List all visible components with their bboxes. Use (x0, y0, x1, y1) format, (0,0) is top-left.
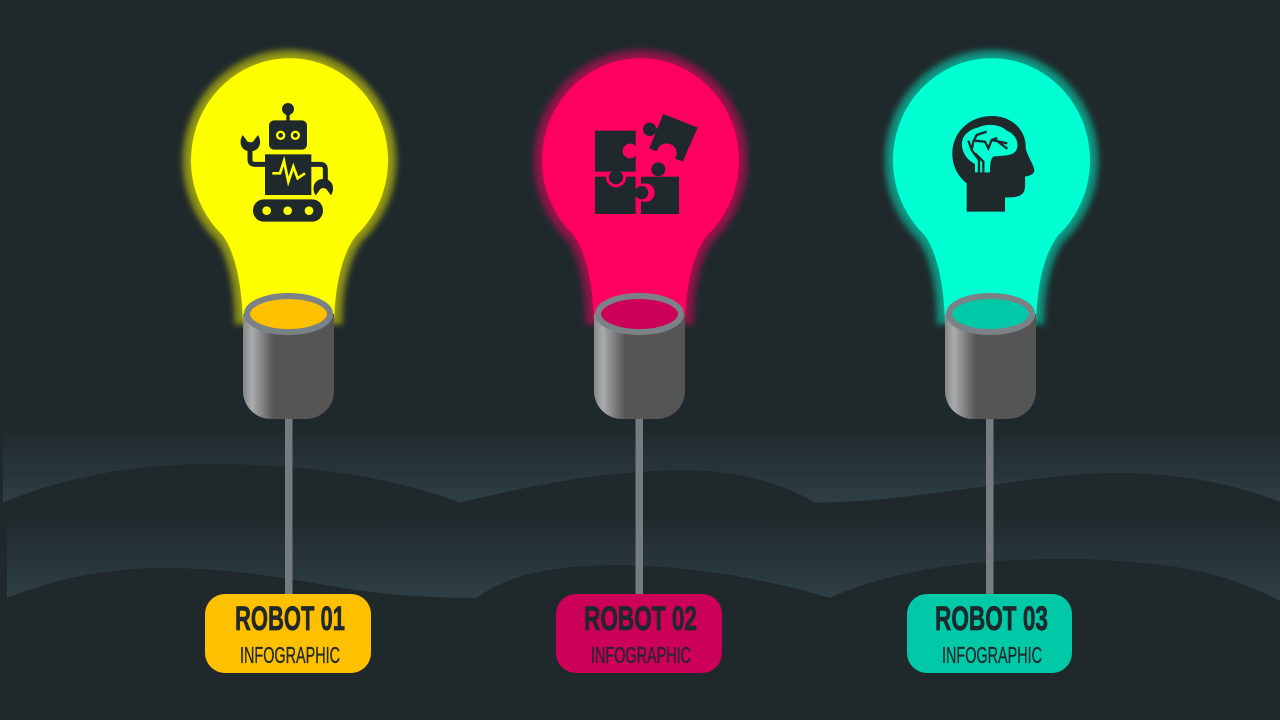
pole 1 (285, 415, 292, 595)
pole 3 (986, 415, 994, 595)
icon: brain head (952, 116, 1034, 212)
bulb 2: pink (542, 58, 739, 325)
label 1: INFOGRAPHIC (240, 642, 340, 668)
background hills: upper band (3, 430, 1280, 520)
label 2: INFOGRAPHIC (591, 642, 691, 668)
label 3: ROBOT 03 (935, 600, 1048, 638)
pole 2 (636, 415, 643, 595)
label 3 (907, 594, 1072, 673)
bulb 3: teal (893, 58, 1090, 325)
bulb 1: yellow (191, 58, 388, 325)
label 2: ROBOT 02 (584, 600, 697, 638)
socket 2 (594, 296, 685, 419)
label 2 (556, 594, 722, 673)
icon: puzzle pieces (595, 114, 698, 214)
label 1 (205, 594, 371, 673)
label 3: INFOGRAPHIC (942, 642, 1042, 668)
background hills: lower band (7, 515, 1280, 640)
socket 3 (945, 296, 1036, 419)
socket 1 (243, 296, 334, 419)
icon: robot (241, 103, 333, 222)
label 1: ROBOT 01 (235, 600, 345, 638)
